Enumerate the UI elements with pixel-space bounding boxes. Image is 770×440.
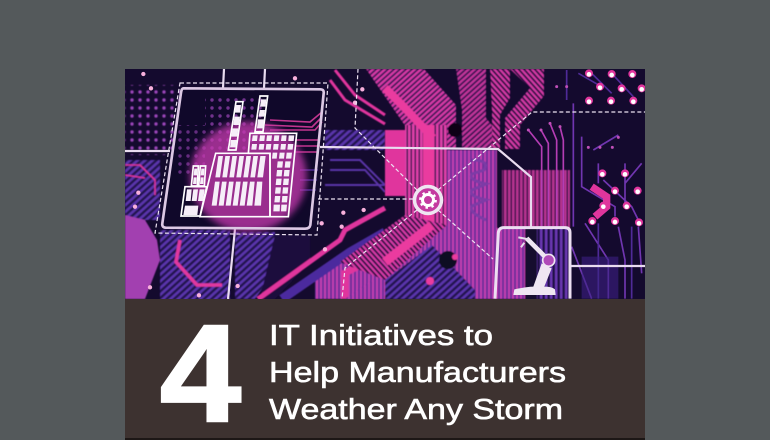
circuit traces: centre bundle bbox=[340, 69, 570, 299]
connector lines bbox=[125, 69, 645, 299]
panel: title band bbox=[125, 297, 645, 440]
factory frame interior bbox=[174, 98, 322, 191]
circuit traces: left half bbox=[125, 70, 385, 300]
icon: gear hub bbox=[414, 186, 442, 214]
title text: Weather Any Storm bbox=[269, 394, 563, 426]
dashed network lines bbox=[155, 69, 645, 299]
panel: circuit board illustration bbox=[125, 69, 645, 300]
icon: factory bbox=[162, 88, 324, 232]
icon: robot arm bbox=[495, 228, 570, 299]
title text: IT Initiatives to bbox=[269, 320, 493, 352]
circuit traces: right side bbox=[528, 70, 642, 299]
title text bbox=[269, 320, 566, 426]
title text: Help Manufacturers bbox=[269, 357, 566, 389]
glowing pads bbox=[135, 74, 364, 295]
